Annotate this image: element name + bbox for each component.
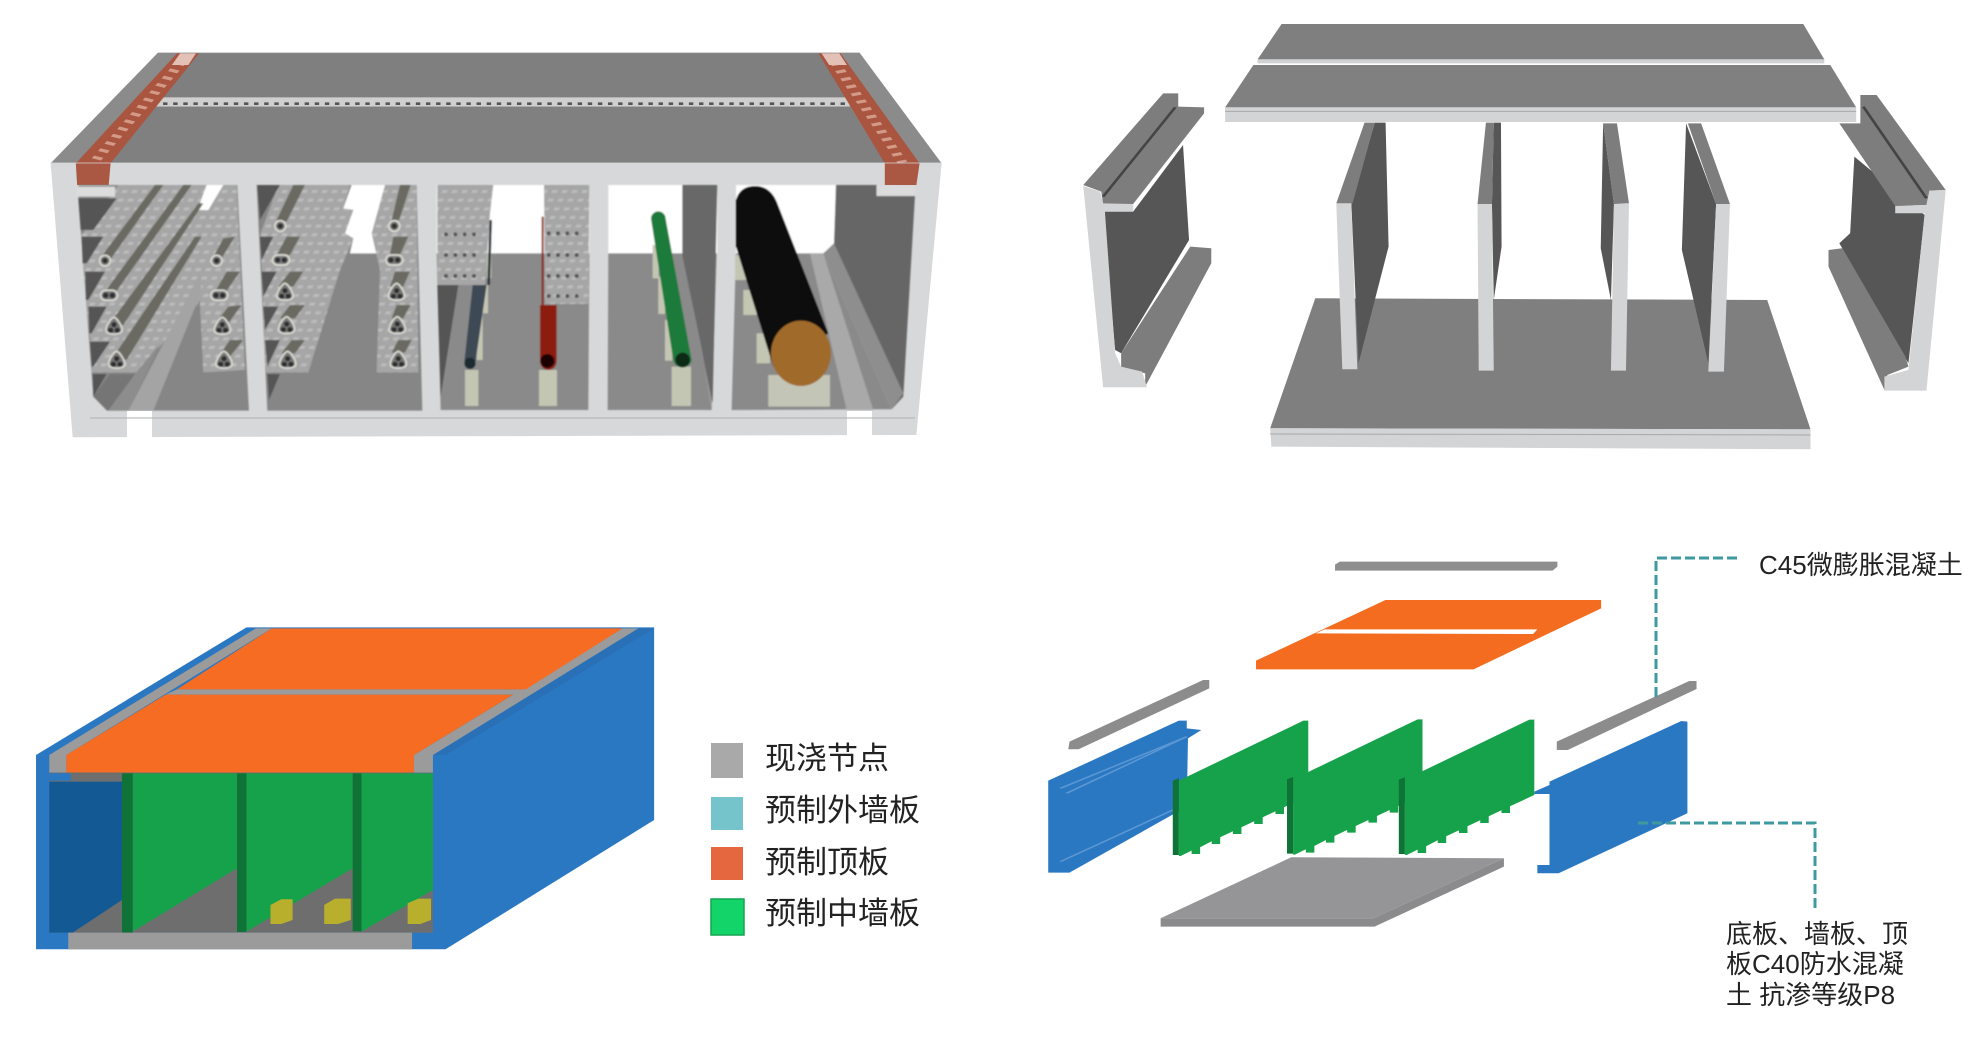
legend item: cast-in-place joint: 现浇节点 [765, 741, 889, 776]
callout text: C40 waterproof concrete: 板C40防水混凝 [1726, 949, 1904, 979]
panel: colour-coded assembled model [36, 627, 654, 949]
base slab [1270, 298, 1810, 449]
legend item: prefab middle wall: 预制中墙板 [765, 896, 920, 931]
legend item: prefab outer wall: 预制外墙板 [765, 793, 920, 828]
legend item: prefab middle wall [711, 896, 920, 935]
callout text: C40 waterproof concrete: 土 抗渗等级P8 [1726, 980, 1895, 1010]
green wall panel 3 [1399, 720, 1534, 855]
green wall panel 2 [1287, 719, 1423, 855]
side joint bars [1068, 680, 1697, 750]
legend [711, 741, 920, 935]
callout text: C45 concrete: C45微膨胀混凝土 [1759, 550, 1963, 580]
green middle wall panels [122, 773, 433, 933]
bays 3 to 5: coloured pipelines [437, 185, 915, 410]
orange roof slabs [66, 628, 623, 773]
right blue wall [1534, 721, 1687, 873]
right outer wall panel [1829, 95, 1946, 391]
orange roof plate [1256, 600, 1601, 669]
top slabs [1225, 24, 1856, 122]
top joint bar [1335, 562, 1557, 571]
panel: colour-coded exploded components [1048, 562, 1697, 927]
bay 1 and bay 2: cable trays [77, 185, 422, 411]
legend item: prefab roof slab: 预制顶板 [765, 845, 889, 880]
roof of assembled tunnel [51, 53, 942, 163]
yellow pipe supports [270, 899, 431, 924]
front concrete frame [51, 163, 942, 437]
legend item: prefab roof slab [711, 845, 889, 880]
cast-in-place joints [49, 628, 638, 773]
callout text: C40 waterproof concrete: 底板、墙板、顶 [1726, 919, 1908, 949]
bottom slab [68, 933, 412, 949]
left blue wall [1048, 721, 1201, 873]
bottom slab gaps of frame [90, 411, 915, 438]
middle wall panels [1336, 123, 1730, 372]
interior with floor and blue wall [49, 773, 433, 933]
left outer wall panel [1083, 93, 1211, 387]
callout line: C40 concrete [1638, 823, 1815, 908]
legend item: cast-in-place joint [711, 741, 889, 778]
panel: exploded grey concrete components [1083, 24, 1946, 449]
blue outer walls [36, 627, 654, 949]
grey base plate [1161, 857, 1504, 927]
green wall panel 1 [1173, 721, 1308, 856]
panel: assembled concrete utility tunnel with pipelines [51, 53, 942, 438]
callout line: C45 concrete [1656, 558, 1738, 697]
